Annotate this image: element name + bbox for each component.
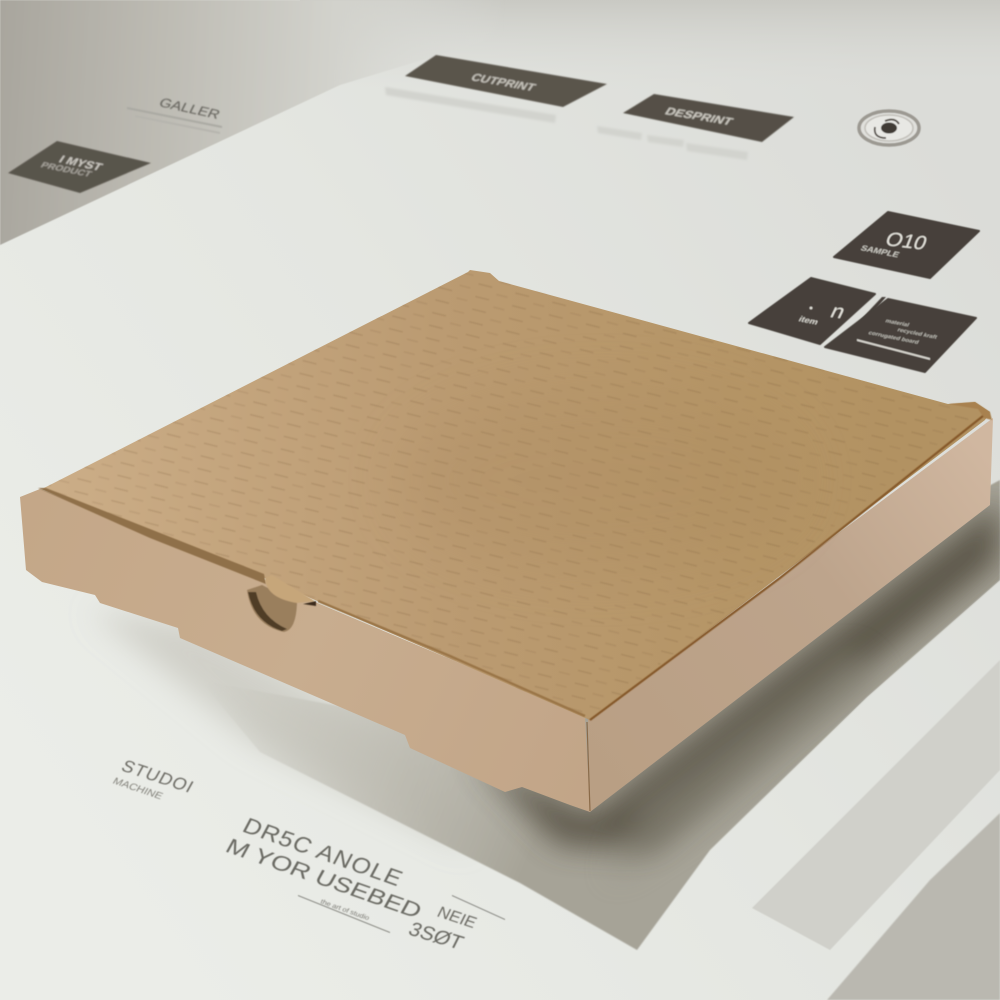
box right side <box>588 418 993 812</box>
badge: top middle <box>623 94 794 142</box>
icon: swirl logo <box>859 111 919 145</box>
badge: 010: O10 <box>882 229 930 254</box>
badge: details: material <box>884 319 910 328</box>
vertical corner edge <box>587 722 590 811</box>
lower right paper strip <box>752 660 1000 950</box>
box cast shadow <box>200 480 1000 950</box>
divider strip <box>849 297 886 334</box>
bottom rule and caption <box>298 895 390 933</box>
corner flap <box>948 402 992 420</box>
badge: n: n <box>827 300 849 323</box>
placeholder bars: top middle <box>597 126 748 160</box>
bottom text: main: DR5C ANOLE <box>239 813 408 891</box>
bottom text: right note <box>405 895 505 954</box>
soft left shadow <box>90 610 470 850</box>
badge: 010: SAMPLE <box>859 243 901 259</box>
badge: top middle: DESPRINT <box>662 105 736 128</box>
lower right corner surface <box>827 813 1000 1000</box>
badge: 010 <box>834 212 979 278</box>
heading: top left: GALLER <box>156 96 222 122</box>
bottom text: studio: STUDOI <box>118 756 198 797</box>
badge: n <box>749 278 875 344</box>
pizza box <box>20 270 993 812</box>
front left crease <box>38 488 266 584</box>
badge: details: recycled kraft <box>896 328 938 340</box>
bottom text: right note: 3SØT <box>405 918 468 954</box>
badge: left: I MYST <box>56 153 106 173</box>
dark contact shadow <box>470 500 1000 880</box>
bottom text: main: M YOR USEBED <box>221 835 426 923</box>
lid corrugation texture <box>42 272 978 720</box>
bottom text: right note: NEIE <box>434 904 479 932</box>
lid centre shade <box>400 390 800 570</box>
badge: left <box>8 141 151 193</box>
bottom rule and caption: the art of studio <box>319 899 370 922</box>
front right crease <box>318 601 585 716</box>
badge: left: PRODUCT <box>38 161 94 179</box>
badge: details: corrugated board <box>867 331 920 346</box>
right crease <box>590 416 983 720</box>
darker surface top left <box>0 0 620 245</box>
bottom text: studio: MACHINE <box>111 776 165 802</box>
badge: details <box>825 299 976 372</box>
badge: top centre: CUTPRINT <box>468 71 539 94</box>
top band shading <box>300 0 1000 90</box>
placeholder bar: top centre <box>385 87 556 123</box>
badge: top centre <box>405 55 607 107</box>
badge: n: item <box>797 314 820 326</box>
box top lid <box>42 270 990 720</box>
box front side <box>20 489 590 812</box>
icon: thumb notch <box>247 575 316 632</box>
heading: top left <box>127 96 222 134</box>
